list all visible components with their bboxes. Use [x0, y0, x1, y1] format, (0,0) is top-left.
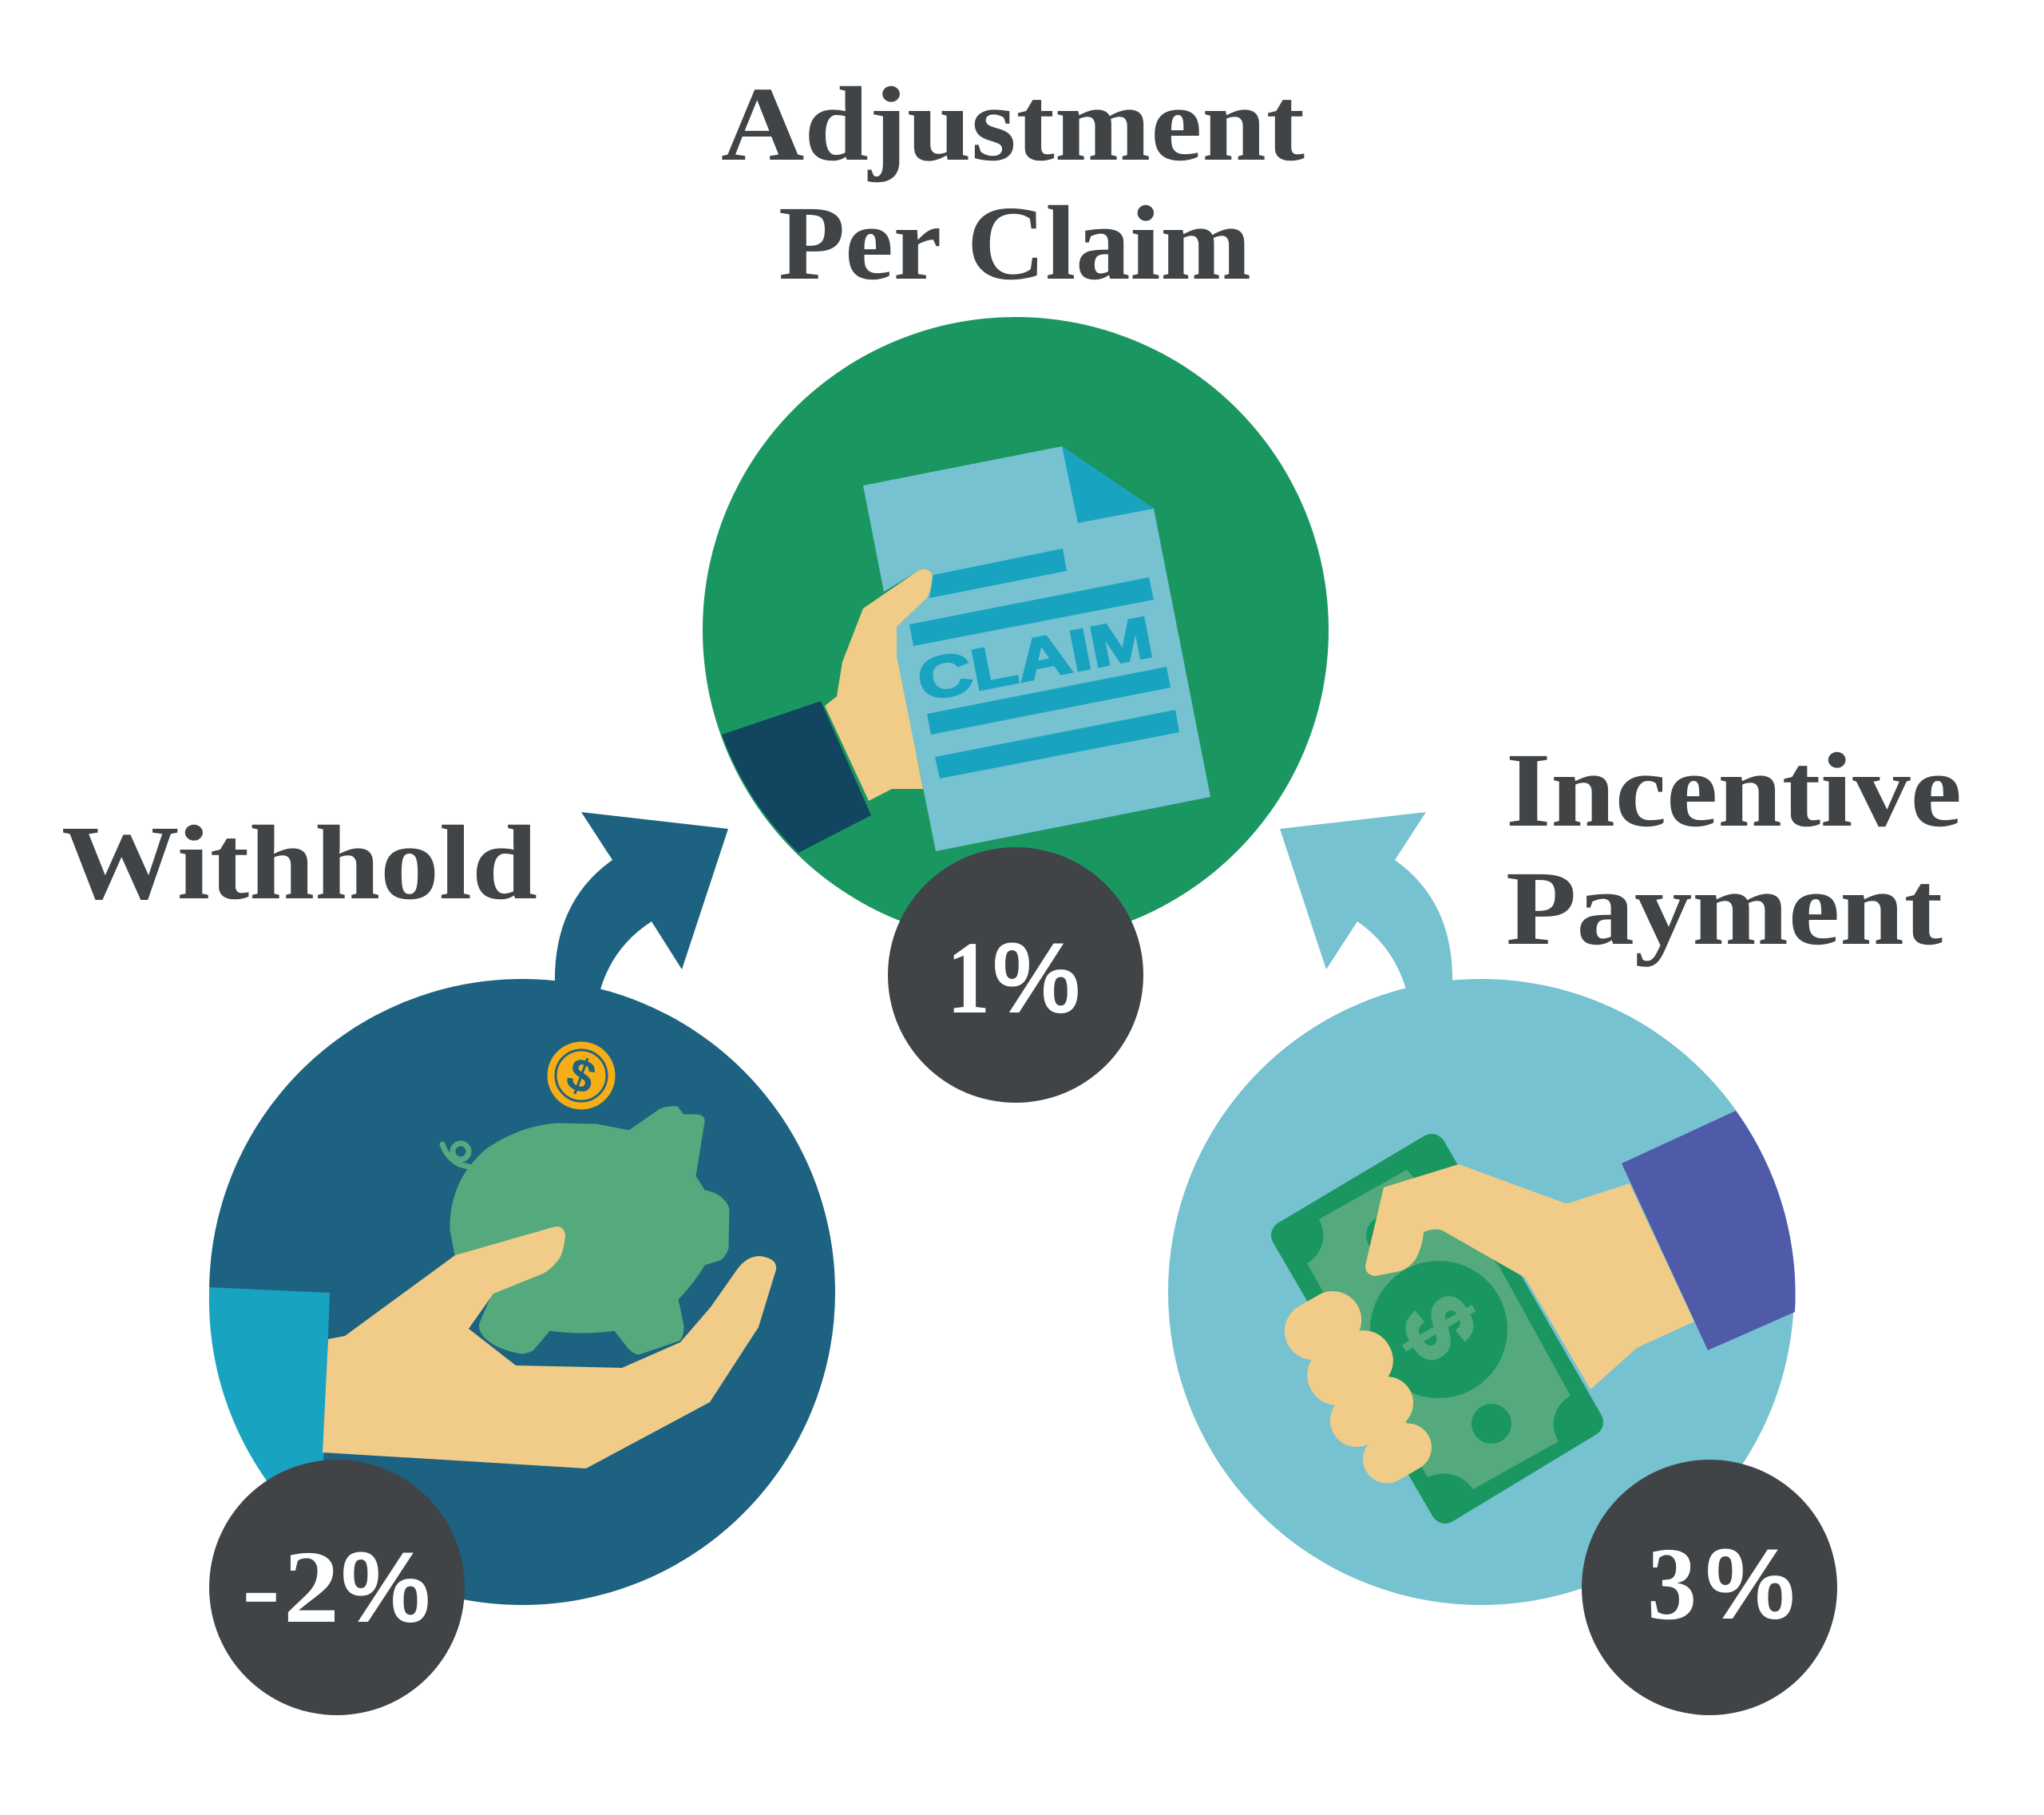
icon: gripping hand [1274, 1111, 1796, 1492]
icon: open hand [209, 1227, 776, 1485]
badge: 3% [1582, 1460, 1837, 1715]
panel: incentive payment [1168, 979, 1796, 1605]
badge: -2%: 2 [283, 1530, 339, 1645]
icon: piggy bank [442, 1108, 728, 1353]
title: Adjustment Per Claim: Per Claim [778, 184, 1251, 302]
icon: coin [548, 1041, 615, 1110]
badge: -2%: % [341, 1532, 430, 1643]
heading: Incentive Payment: Payment [1506, 849, 1943, 967]
icon: dollar bill [1285, 1148, 1589, 1509]
badge: -2% [209, 1460, 465, 1715]
heading: Withhold: Withhold [61, 803, 537, 921]
light blue circle [1168, 979, 1794, 1605]
title: Adjustment Per Claim: Adjustment [721, 65, 1305, 183]
badge: 1%: % [992, 923, 1080, 1034]
arrow: incentive to claim [1280, 812, 1452, 989]
heading: Incentive Payment [1506, 731, 1962, 967]
heading: Incentive Payment: Incentive [1506, 731, 1962, 849]
icon: claim document [863, 446, 1210, 851]
title: Adjustment Per Claim [721, 65, 1305, 302]
badge: 3%: 3 [1647, 1527, 1697, 1642]
badge: -2%: - [242, 1530, 280, 1645]
icon: hand holding claim [722, 569, 932, 853]
badge: 1% [888, 847, 1143, 1103]
panel: adjustment per claim [703, 317, 1329, 943]
blue circle [209, 979, 835, 1605]
icon: dollar bill: $ [1380, 1278, 1499, 1377]
arrow: withhold to claim [555, 812, 728, 989]
badge: 3%: % [1705, 1529, 1795, 1640]
icon: coin: $ [561, 1047, 602, 1105]
panel: withhold [209, 979, 835, 1605]
green circle [703, 317, 1329, 943]
icon: claim document: CLAIM [913, 604, 1159, 714]
badge: 1%: 1 [947, 921, 990, 1036]
